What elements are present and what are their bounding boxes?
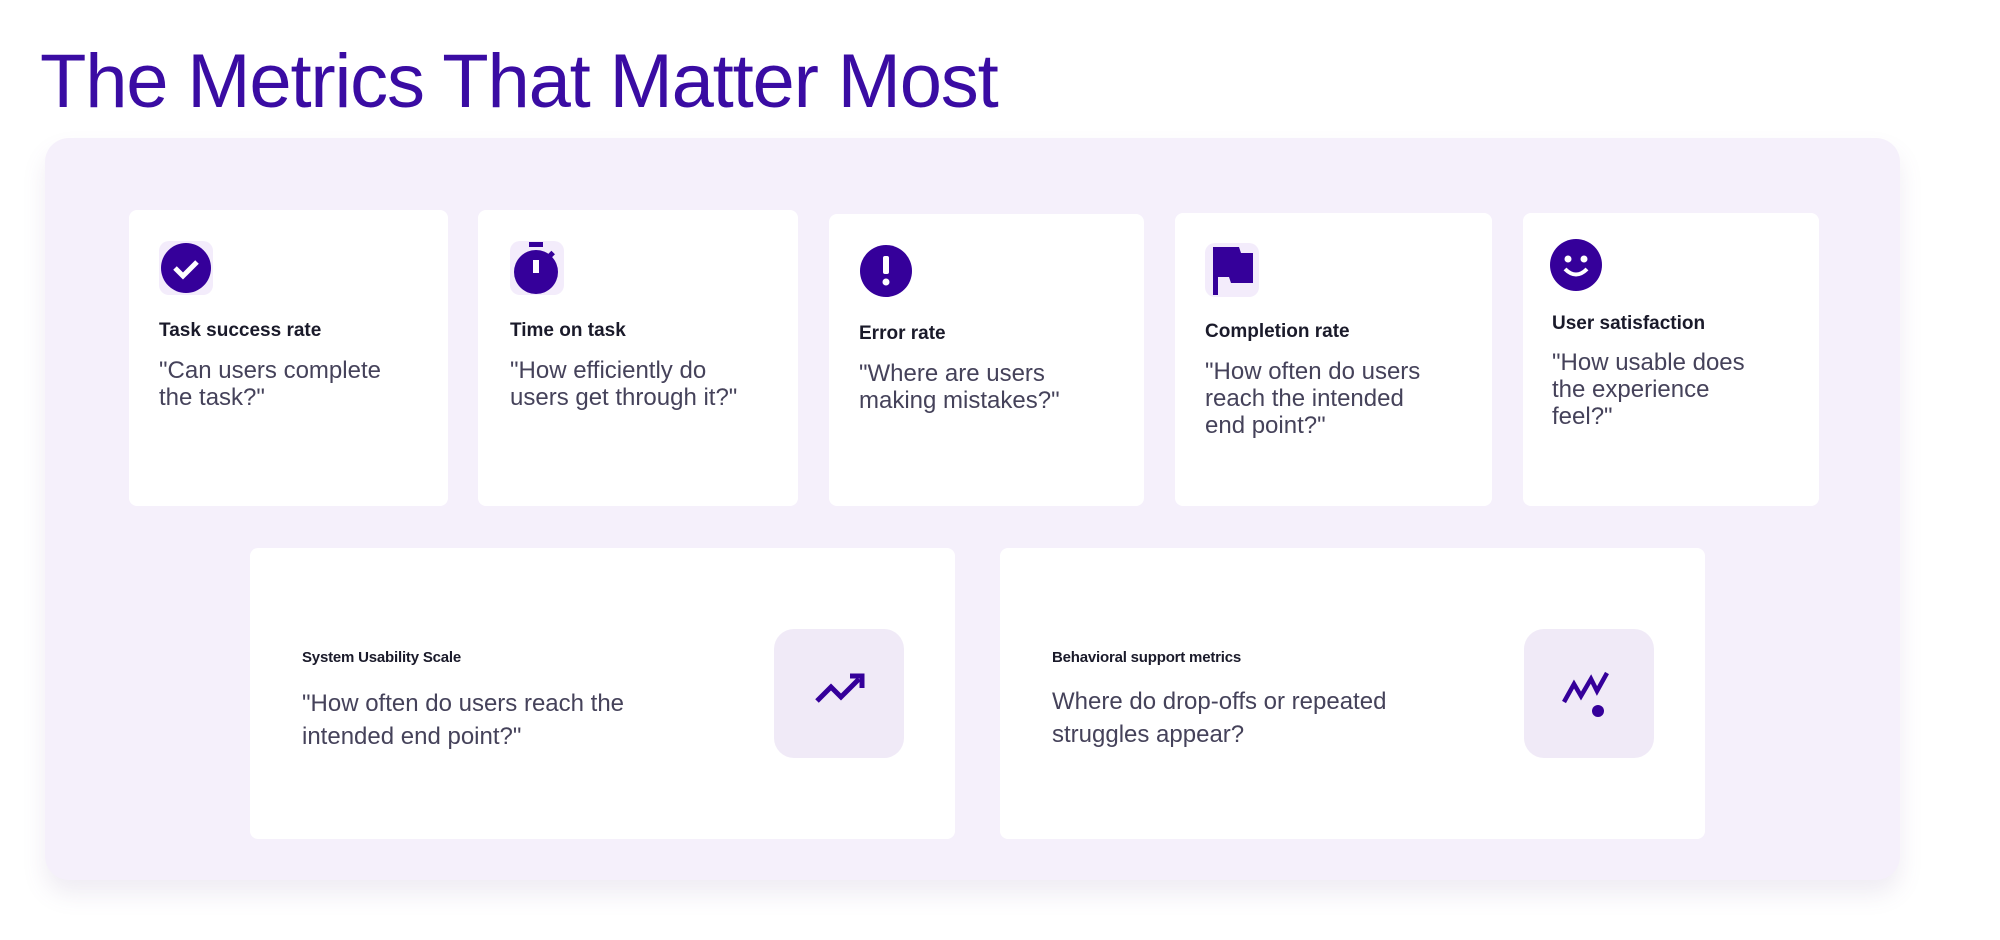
heading: Task success rate: [159, 320, 321, 341]
quote: end point?": [1205, 412, 1326, 439]
icon: check: [159, 241, 213, 295]
icon: flag: [1205, 243, 1259, 297]
quote: the task?": [159, 384, 265, 411]
icon: exclamation: [860, 245, 912, 297]
quote: [510, 357, 737, 411]
quote: struggles appear?: [1052, 721, 1244, 748]
icon: stopwatch: [510, 241, 564, 295]
heading: Behavioral support metrics: [1052, 649, 1241, 666]
heading: Completion rate: [1205, 321, 1350, 342]
card: task success rate: [129, 210, 448, 506]
quote: [1205, 358, 1420, 439]
heading: Error rate: [859, 323, 946, 344]
quote: "How usable does: [1552, 349, 1745, 376]
quote: "Can users complete: [159, 357, 381, 384]
quote: Where do drop-offs or repeated: [1052, 688, 1386, 715]
card: user satisfaction: [1523, 213, 1819, 506]
quote: "How efficiently do: [510, 357, 706, 384]
icon: trend up: [774, 629, 904, 758]
card: completion rate: [1175, 213, 1492, 506]
icon: smiley: [1550, 239, 1602, 291]
quote: feel?": [1552, 403, 1613, 430]
quote: the experience: [1552, 376, 1709, 403]
title: The Metrics That Matter Most: [40, 39, 997, 124]
heading: User satisfaction: [1552, 313, 1705, 334]
quote: users get through it?": [510, 384, 737, 411]
quote: [1052, 688, 1386, 748]
quote: [1552, 349, 1745, 430]
icon: zigzag with dot: [1524, 629, 1654, 758]
quote: [159, 357, 381, 411]
heading: Time on task: [510, 320, 626, 341]
card: system usability scale: [250, 548, 955, 839]
quote: intended end point?": [302, 723, 521, 750]
quote: "Where are users: [859, 360, 1045, 387]
panel: metrics: [45, 138, 1900, 880]
quote: "How often do users reach the: [302, 690, 624, 717]
quote: [302, 690, 624, 750]
card: behavioral support metrics: [1000, 548, 1705, 839]
heading: System Usability Scale: [302, 649, 461, 666]
quote: reach the intended: [1205, 385, 1404, 412]
card: error rate: [829, 214, 1144, 506]
quote: making mistakes?": [859, 387, 1060, 414]
quote: [859, 360, 1060, 414]
card: time on task: [478, 210, 798, 506]
quote: "How often do users: [1205, 358, 1420, 385]
